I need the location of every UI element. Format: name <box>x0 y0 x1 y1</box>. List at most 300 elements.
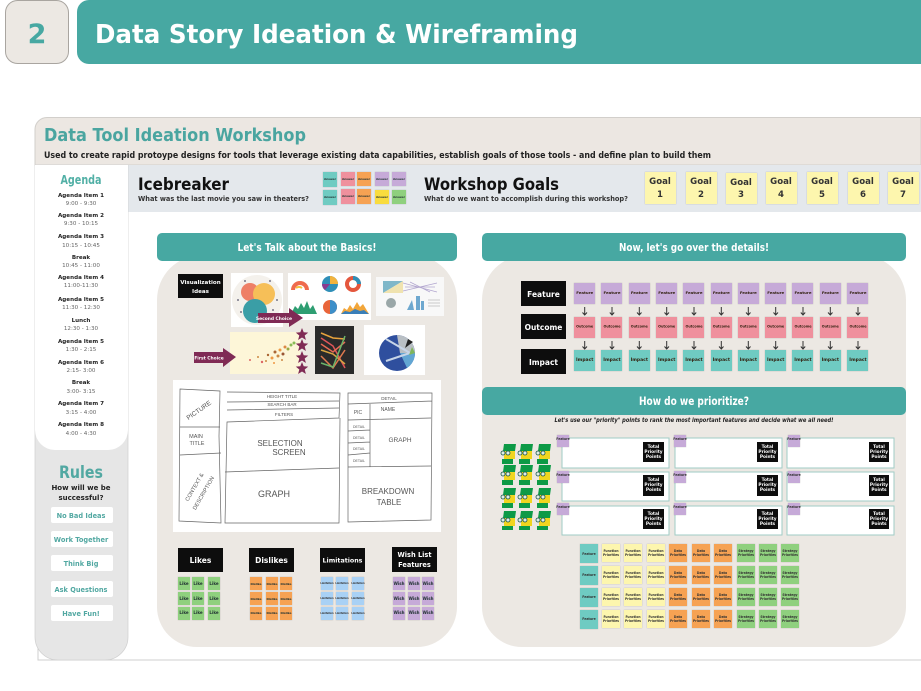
total priority points labels: Points <box>760 521 776 527</box>
function priorities notes: Priorities <box>625 597 641 601</box>
visualization ideas label: Ideas <box>192 289 210 295</box>
chart thumbnail: first choice scatter <box>230 332 300 374</box>
outcome row: Outcome <box>849 324 867 328</box>
agenda panel: Agenda Item 2 <box>58 213 104 219</box>
data priorities notes: Priorities <box>693 619 709 623</box>
agenda panel: 2:15- 3:00 <box>67 368 96 374</box>
function priorities notes: Function <box>648 549 664 553</box>
outcome row: Outcome <box>658 324 676 328</box>
data priorities notes: Priorities <box>715 597 731 601</box>
icebreaker answer notes <box>323 172 406 205</box>
icebreaker heading <box>138 175 309 203</box>
feature tabs <box>556 435 801 515</box>
goal notes: Goal <box>770 177 792 187</box>
details heading: Now, let's go over the details! <box>619 242 769 254</box>
impact row: Impact <box>603 357 622 363</box>
impact row: Impact <box>794 357 813 363</box>
dislikes column: Dislike <box>267 611 277 615</box>
total priority points labels: Points <box>646 521 662 527</box>
wireframe sketch: BREAKDOWN <box>362 487 414 496</box>
feature row <box>521 281 868 306</box>
function priorities notes: Priorities <box>648 575 664 579</box>
icebreaker answer notes: Answer <box>393 177 406 181</box>
limitations column: Limitation <box>351 612 365 615</box>
rule buttons: Ask Questions <box>55 586 108 594</box>
dislikes column: Dislike <box>267 597 277 601</box>
wireframe sketch: GRAPH <box>388 437 412 444</box>
total priority points labels: Priority <box>758 516 777 522</box>
data priorities notes: Data <box>719 571 727 575</box>
wireframe sketch: PICTURE <box>185 399 213 422</box>
agenda panel: Agenda Item 3 <box>58 234 104 240</box>
function priorities notes: Function <box>648 571 664 575</box>
goal notes: 3 <box>738 190 744 200</box>
total priority points labels: Total <box>873 444 885 450</box>
likes column: Like <box>179 596 189 601</box>
data priorities notes: Priorities <box>693 553 709 557</box>
total priority points labels: Points <box>871 454 887 460</box>
wish list column: Wish <box>408 581 420 586</box>
step number badge: 2 <box>28 19 46 50</box>
likes column: Like <box>209 596 219 601</box>
rules heading <box>51 463 111 502</box>
total priority points labels: Total <box>762 511 774 517</box>
impact row: Impact <box>740 357 758 363</box>
wireframe sketch: SCREEN <box>272 448 306 457</box>
goal notes: Goal <box>649 177 671 187</box>
limitations column: Limitation <box>335 612 349 615</box>
feature row: Feature <box>527 290 560 299</box>
feature tabs: Feature <box>787 505 801 509</box>
agenda panel: 3:15 - 4:00 <box>66 410 97 416</box>
outcome row: Outcome <box>631 324 649 328</box>
function priorities notes: Function <box>625 571 641 575</box>
prioritize instruction: Let's use our "priority" points to rank the most important features and decide what we all need! <box>554 418 834 424</box>
wish list column: Wish <box>393 596 405 601</box>
strategy priorities notes: Priorities <box>738 575 754 579</box>
icebreaker answer notes: Answer <box>393 195 406 199</box>
wireframe sketch: NAME <box>381 407 396 413</box>
limitations column: Limitation <box>335 597 349 600</box>
strategy priorities notes: Priorities <box>782 597 798 601</box>
agenda panel: 10:45 - 11:00 <box>62 263 100 269</box>
strategy priorities notes: Strategy <box>738 593 754 597</box>
data priorities notes: Data <box>719 593 727 597</box>
board frame <box>38 165 921 660</box>
rule buttons: No Bad Ideas <box>57 512 105 520</box>
outcome row: Outcome <box>794 324 812 328</box>
limitations column: Limitations <box>323 558 363 564</box>
strategy priorities notes: Strategy <box>738 571 754 575</box>
agenda panel: 4:00 - 4:30 <box>66 431 97 437</box>
agenda panel: Agenda Item 5 <box>58 297 104 303</box>
arrow: second choice: Second Choice <box>256 316 292 322</box>
strategy priorities notes: Priorities <box>782 575 798 579</box>
strategy priorities notes: Priorities <box>760 553 776 557</box>
likes column: Like <box>209 581 219 586</box>
likes column: Like <box>179 581 189 586</box>
outcome row: Outcome <box>713 324 731 328</box>
total priority points labels: Points <box>871 487 887 493</box>
data priorities notes: Data <box>697 593 705 597</box>
strategy priorities notes: Priorities <box>738 553 754 557</box>
dislikes column: Dislike <box>281 597 291 601</box>
total priority points labels: Points <box>646 454 662 460</box>
priority point tokens <box>501 444 551 530</box>
impact row: Impact <box>576 357 594 363</box>
strategy priorities notes: Strategy <box>782 571 798 575</box>
agenda panel: 10:15 - 10:45 <box>62 243 100 249</box>
impact row: Impact <box>713 357 731 363</box>
goal notes: 7 <box>900 190 906 200</box>
total priority points labels: Priority <box>870 482 888 488</box>
total priority points labels: Priority <box>870 516 888 522</box>
function priorities notes: Function <box>603 593 619 597</box>
details heading <box>482 233 906 261</box>
wish list column: Wish <box>422 596 434 601</box>
goal notes: Goal <box>690 177 712 187</box>
dislikes column: Dislike <box>251 582 261 586</box>
feature row: Feature <box>631 290 648 295</box>
goal notes: 4 <box>778 190 784 200</box>
function priorities notes: Priorities <box>603 597 619 601</box>
function priorities notes: Function <box>625 593 641 597</box>
data priorities notes: Priorities <box>693 597 709 601</box>
outcome row: Outcome <box>740 324 758 328</box>
total priority points labels: Total <box>762 444 774 450</box>
agenda panel <box>35 165 128 450</box>
feature notes <box>580 544 598 629</box>
total priority points labels: Priority <box>644 482 663 488</box>
total priority points labels: Priority <box>758 449 777 455</box>
wish list column: Wish <box>408 610 420 615</box>
feature row: Feature <box>658 290 676 295</box>
data priorities notes: Data <box>697 615 705 619</box>
function priorities notes: Function <box>625 615 641 619</box>
feature notes: Feature <box>582 573 596 577</box>
icebreaker answer notes: Answer <box>358 177 371 181</box>
goal notes: 6 <box>860 190 866 200</box>
agenda panel: Agenda Item 5 <box>58 339 104 345</box>
likes column: Like <box>193 581 203 586</box>
rule buttons: Have Fun! <box>62 610 100 618</box>
likes column: Likes <box>190 556 212 565</box>
strategy priorities notes: Strategy <box>782 593 798 597</box>
agenda panel: 11:00-11:30 <box>64 283 99 289</box>
workshop header band <box>35 118 921 165</box>
agenda panel: 9:30 - 10:15 <box>64 221 99 227</box>
goal notes <box>645 172 919 204</box>
total priority points labels: Total <box>648 511 660 517</box>
wireframe sketch: SEARCH BAR <box>267 402 297 407</box>
outcome row: Outcome <box>685 324 703 328</box>
feature tabs: Feature <box>673 505 687 509</box>
arrow: first choice <box>194 348 236 367</box>
feature row: Feature <box>604 290 621 295</box>
feature tabs: Feature <box>787 473 801 477</box>
limitations column: Limitation <box>351 597 365 600</box>
function priorities notes: Function <box>625 549 641 553</box>
function priorities notes: Priorities <box>648 553 664 557</box>
total priority points labels: Total <box>762 477 774 483</box>
agenda panel: 12:30 - 1:30 <box>64 326 99 332</box>
function priorities notes: Priorities <box>603 619 619 623</box>
outcome row: Outcome <box>767 324 785 328</box>
strategy priorities notes: Priorities <box>738 619 754 623</box>
function priorities notes <box>602 544 665 628</box>
limitations column: Limitation <box>320 582 334 585</box>
dislikes column <box>249 548 294 620</box>
icebreaker answer notes: Answer <box>342 177 355 181</box>
goal notes: 1 <box>657 190 663 200</box>
function priorities notes: Priorities <box>648 619 664 623</box>
goal notes: 5 <box>819 190 825 200</box>
data priorities notes: Data <box>697 549 705 553</box>
data priorities notes: Priorities <box>670 575 686 579</box>
function priorities notes: Priorities <box>603 553 619 557</box>
sidebar <box>35 165 128 660</box>
total priority points labels: Total <box>873 477 885 483</box>
panel: basics <box>157 233 457 647</box>
function priorities notes: Priorities <box>603 575 619 579</box>
wish list column <box>392 547 437 620</box>
icebreaker and goals band <box>128 165 921 212</box>
data priorities notes: Priorities <box>670 597 686 601</box>
wish list column: Wish <box>422 610 434 615</box>
total priority points labels: Priority <box>870 449 888 455</box>
impact row: Impact <box>685 357 704 363</box>
impact row: Impact <box>658 357 676 363</box>
agenda panel: Agenda <box>60 173 102 187</box>
data priorities notes: Data <box>719 615 727 619</box>
dislikes column: Dislike <box>251 611 261 615</box>
rule buttons: Think Big <box>64 560 99 568</box>
icebreaker answer notes: Answer <box>324 195 337 199</box>
feature tabs: Feature <box>556 473 570 477</box>
wireframe sketch: TITLE <box>190 441 205 447</box>
priority stars <box>296 328 308 374</box>
strategy priorities notes: Priorities <box>760 619 776 623</box>
likes column: Like <box>209 610 219 615</box>
agenda panel: 11:30 - 12:30 <box>62 305 100 311</box>
total priority points labels: Points <box>646 487 662 493</box>
arrows: feature to outcome <box>582 307 860 315</box>
basics heading <box>157 233 457 261</box>
impact row: Impact <box>767 357 785 363</box>
function priorities notes: Priorities <box>625 553 641 557</box>
function priorities notes: Function <box>603 549 619 553</box>
wish list column: Wish List <box>398 551 432 559</box>
agenda panel: 3:00- 3:15 <box>67 389 96 395</box>
limitations column: Limitation <box>320 597 334 600</box>
wireframe sketch: HEIGHT TITLE <box>267 394 297 399</box>
icebreaker answer notes: Answer <box>376 177 389 181</box>
agenda panel: Agenda Item 7 <box>58 401 104 407</box>
dislikes column: Dislike <box>281 611 291 615</box>
agenda panel: Agenda Item 4 <box>58 275 104 281</box>
goal notes: Goal <box>852 177 874 187</box>
wireframe sketch: DETAIL <box>353 425 365 429</box>
feature tabs: Feature <box>556 505 570 509</box>
feature row: Feature <box>795 290 812 295</box>
outcome row: Outcome <box>576 324 594 328</box>
strategy priorities notes: Priorities <box>760 575 776 579</box>
outcome row: Outcome <box>822 324 840 328</box>
visualization ideas label: Visualization <box>180 280 221 286</box>
strategy priorities notes: Strategy <box>738 549 754 553</box>
goal notes: Goal <box>811 177 833 187</box>
impact row: Impact <box>631 357 649 363</box>
chart thumbnail: bubbles <box>231 273 283 327</box>
feature tabs: Feature <box>787 437 801 441</box>
feature row: Feature <box>767 290 785 295</box>
data priorities notes: Priorities <box>715 553 731 557</box>
feature tabs: Feature <box>673 437 687 441</box>
workshop board <box>35 118 921 660</box>
data priorities notes <box>669 544 732 628</box>
panel: details <box>482 233 906 647</box>
agenda panel: Agenda Item 8 <box>58 422 104 428</box>
goal notes: 2 <box>698 190 704 200</box>
limitations column <box>320 548 365 620</box>
likes column: Like <box>193 596 203 601</box>
icebreaker heading: What was the last movie you saw in theaters? <box>138 195 309 203</box>
icebreaker answer notes: Answer <box>376 195 389 199</box>
feature tabs: Feature <box>556 437 570 441</box>
data priorities notes: Priorities <box>670 553 686 557</box>
rule buttons: Work Together <box>54 536 109 544</box>
feature row: Feature <box>850 290 867 295</box>
feature row: Feature <box>740 290 757 295</box>
workshop goals heading: What do we want to accomplish during this workshop? <box>424 195 628 203</box>
total priority points labels: Points <box>760 487 776 493</box>
feature notes: Feature <box>582 617 596 621</box>
data priorities notes: Data <box>674 593 682 597</box>
strategy priorities notes: Strategy <box>760 615 776 619</box>
feature notes: Feature <box>582 595 596 599</box>
function priorities notes: Function <box>648 593 664 597</box>
strategy priorities notes: Priorities <box>738 597 754 601</box>
basics heading: Let's Talk about the Basics! <box>238 242 376 254</box>
chart thumbnail: parallel views <box>376 277 444 316</box>
function priorities notes: Function <box>603 571 619 575</box>
outcome row <box>521 314 868 339</box>
agenda panel: Agenda Item 6 <box>58 360 104 366</box>
rules heading: Rules <box>59 463 103 483</box>
total priority points labels: Priority <box>644 449 663 455</box>
chart thumbnail: chord diagram <box>364 325 425 375</box>
feature tabs: Feature <box>673 473 687 477</box>
strategy priorities notes: Strategy <box>760 549 776 553</box>
feature row: Feature <box>713 290 730 295</box>
rules heading: successful? <box>58 494 104 502</box>
strategy priorities notes: Strategy <box>760 571 776 575</box>
priorities grid <box>580 544 799 629</box>
data priorities notes: Priorities <box>715 575 731 579</box>
feature row: Feature <box>822 290 839 295</box>
feature row: Feature <box>576 290 594 295</box>
strategy priorities notes: Priorities <box>782 553 798 557</box>
total priority points labels: Points <box>871 521 887 527</box>
title banner <box>77 0 921 64</box>
strategy priorities notes: Priorities <box>782 619 798 623</box>
impact row <box>521 349 868 374</box>
data priorities notes: Priorities <box>715 619 731 623</box>
data priorities notes: Data <box>719 549 727 553</box>
arrow: first choice: First Choice <box>194 356 224 362</box>
limitations column: Limitation <box>351 582 365 585</box>
total priority points labels: Total <box>873 511 885 517</box>
wireframe sketch: DETAIL <box>353 447 365 451</box>
function priorities notes: Function <box>648 615 664 619</box>
impact row: Impact <box>849 357 868 363</box>
wish list column: Wish <box>422 581 434 586</box>
agenda panel: Break <box>72 380 90 386</box>
step number badge <box>6 0 68 64</box>
workshop goals heading <box>424 175 628 203</box>
visualization ideas label <box>178 274 223 298</box>
workshop header band: Data Tool Ideation Workshop <box>44 125 306 146</box>
agenda panel: 9:00 - 9:30 <box>66 201 97 207</box>
wireframe sketch: MAIN <box>189 434 203 440</box>
data priorities notes: Data <box>674 571 682 575</box>
data priorities notes: Priorities <box>670 619 686 623</box>
prioritize heading <box>482 387 906 415</box>
outcome row: Outcome <box>603 324 621 328</box>
wireframe sketch <box>173 380 441 532</box>
icebreaker answer notes: Answer <box>358 194 371 198</box>
arrow: second choice <box>256 308 303 327</box>
wireframe sketch: DETAIL <box>353 459 365 463</box>
wireframe sketch: DESCRIPTION <box>192 476 216 511</box>
agenda panel: Break <box>72 255 90 261</box>
function priorities notes: Function <box>603 615 619 619</box>
strategy priorities notes <box>737 544 799 628</box>
strategy priorities notes: Priorities <box>760 597 776 601</box>
wish list column: Features <box>398 561 431 569</box>
data priorities notes: Data <box>674 615 682 619</box>
strategy priorities notes: Strategy <box>782 615 798 619</box>
prioritize heading: How do we prioritize? <box>639 394 749 408</box>
strategy priorities notes: Strategy <box>738 615 754 619</box>
limitations column: Limitation <box>320 612 334 615</box>
total priority points labels: Points <box>760 454 776 460</box>
chart thumbnail: slope chart <box>315 326 354 374</box>
function priorities notes: Priorities <box>648 597 664 601</box>
wireframe sketch: TABLE <box>377 498 401 507</box>
impact row: Impact <box>529 358 558 367</box>
total priority points labels: Priority <box>758 482 777 488</box>
dislikes column: Dislike <box>251 597 261 601</box>
outcome row: Outcome <box>525 323 562 332</box>
wish list column: Wish <box>408 596 420 601</box>
rule buttons <box>51 507 113 621</box>
strategy priorities notes: Strategy <box>760 593 776 597</box>
wireframe sketch: PIC <box>354 410 363 416</box>
dislikes column: Dislike <box>267 582 277 586</box>
priority boxes <box>556 435 894 535</box>
dislikes column: Dislike <box>281 582 291 586</box>
wireframe sketch: SELECTION <box>257 439 303 448</box>
limitations column: Limitation <box>335 582 349 585</box>
likes column: Like <box>193 610 203 615</box>
agenda panel: 1:30 - 2:15 <box>66 347 97 353</box>
function priorities notes: Priorities <box>625 575 641 579</box>
icebreaker answer notes: Answer <box>342 194 355 198</box>
data priorities notes: Data <box>674 549 682 553</box>
wireframe sketch: CONTEXT & <box>185 472 206 503</box>
function priorities notes: Priorities <box>625 619 641 623</box>
